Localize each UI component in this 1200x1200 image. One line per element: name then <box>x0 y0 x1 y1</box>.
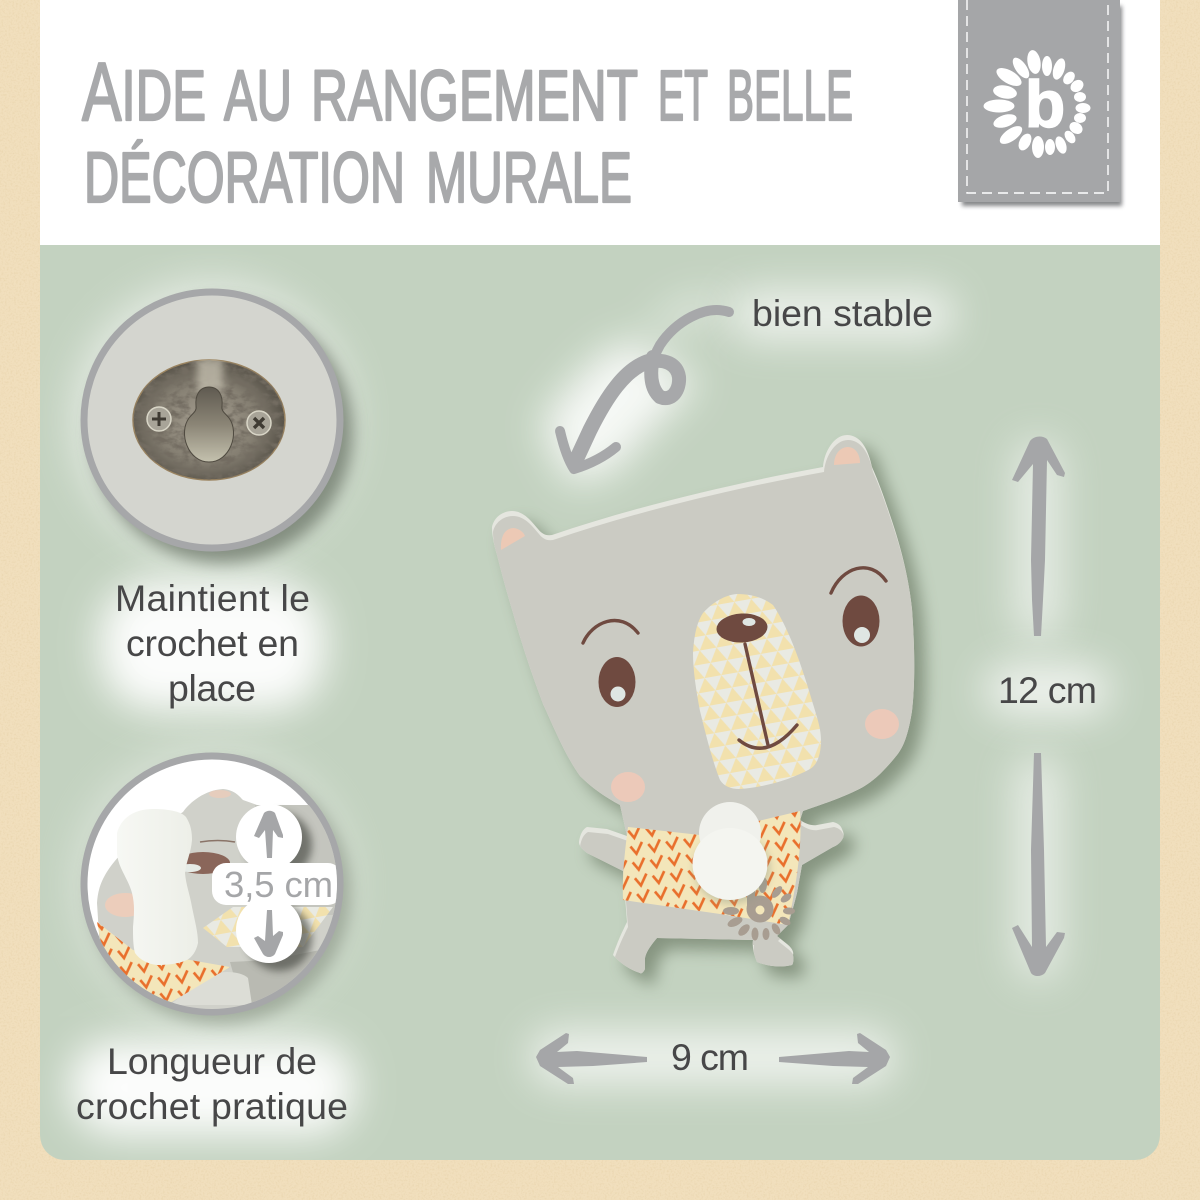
circle: hook length detail <box>84 756 351 1024</box>
bear face and body <box>493 440 915 978</box>
height label: 12 cm <box>998 669 1097 711</box>
left eyebrow <box>583 621 638 643</box>
caption: maintient le crochet: place <box>168 667 256 709</box>
3,5 cm: 3,5 cm <box>224 864 333 905</box>
nose <box>716 612 768 644</box>
title <box>82 45 853 218</box>
scarf <box>623 811 801 925</box>
label: bien stable: bien stable <box>752 292 933 334</box>
bear body edge <box>492 435 914 973</box>
caption: longueur de crochet: Longueur de <box>107 1040 317 1082</box>
arrow: curled pointing to bear <box>560 310 729 469</box>
left eye <box>598 657 636 707</box>
bear shadow <box>503 446 925 984</box>
caption: maintient le crochet: crochet en <box>126 622 299 664</box>
panel: white header <box>40 0 1160 245</box>
panel: green content area <box>40 245 1160 1160</box>
upper white badge <box>236 805 302 863</box>
title: MURALE <box>426 139 632 218</box>
screw left <box>147 407 171 431</box>
upper badge shadow <box>246 812 312 878</box>
title: RANGEMENT <box>311 57 638 136</box>
mouth <box>739 644 797 748</box>
muzzle <box>693 594 821 789</box>
caption: maintient le crochet <box>115 577 310 709</box>
white glows behind text and arrows <box>70 280 1110 1135</box>
hook peg <box>117 809 198 965</box>
bear wall hook <box>492 435 915 978</box>
left cheek <box>611 772 645 802</box>
screw right <box>247 411 271 435</box>
arrow: width left <box>536 1033 647 1084</box>
width label: 9 cm <box>671 1036 749 1078</box>
title: DÉCORATION <box>84 139 405 218</box>
lower white badge <box>236 905 302 963</box>
caption: longueur de crochet <box>76 1040 348 1127</box>
arrow: height up <box>1012 437 1065 636</box>
lower badge shadow <box>246 905 312 971</box>
metal plate <box>133 358 285 480</box>
arrow down <box>254 910 283 957</box>
logo: petals <box>984 49 1090 158</box>
logo: b: b <box>1025 67 1065 141</box>
title: BELLE <box>727 57 853 136</box>
brand tag with logo <box>958 0 1122 206</box>
left ear inner <box>501 528 525 550</box>
measurement label <box>212 863 342 905</box>
arrow up <box>254 811 283 858</box>
caption: longueur de crochet: crochet pratique <box>76 1085 348 1127</box>
title: AIDE <box>82 45 206 138</box>
right eye <box>842 596 880 646</box>
arrow: height down <box>1012 753 1065 976</box>
right cheek <box>865 709 899 739</box>
right ear inner <box>834 447 860 465</box>
title: ET <box>658 57 708 136</box>
caption: maintient le crochet: Maintient le <box>115 577 310 619</box>
bear close-up <box>97 789 345 1015</box>
title: AU <box>224 57 292 136</box>
circle: wall-mount detail <box>84 292 353 563</box>
white hook knob <box>692 802 770 904</box>
bear wordmark sun <box>723 877 795 940</box>
arrow: width right <box>779 1033 890 1084</box>
